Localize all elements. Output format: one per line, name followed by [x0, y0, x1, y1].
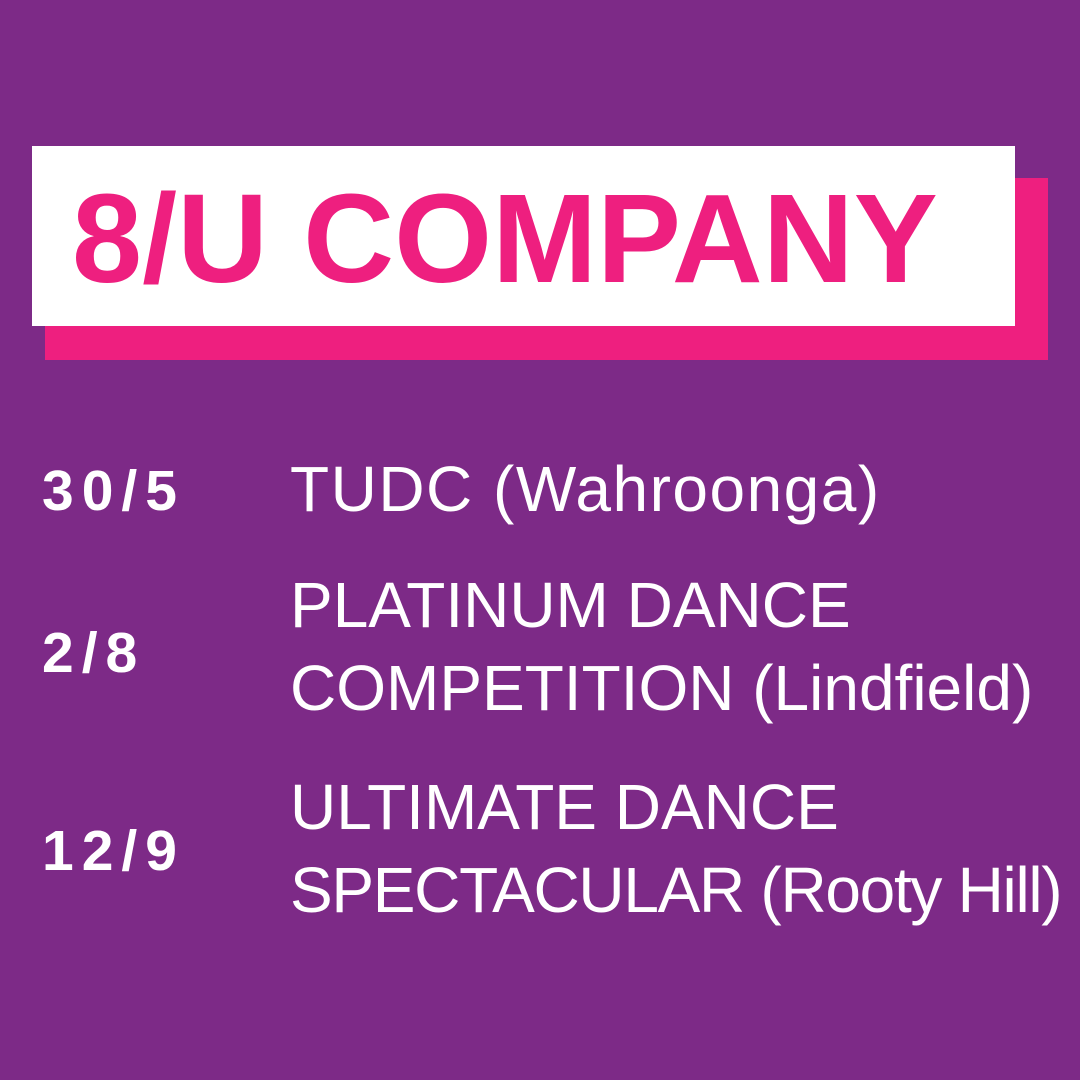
title banner [32, 146, 1048, 360]
event: Ultimate: SPECTACULAR (Rooty Hill) [290, 854, 1061, 926]
date: 12/9: 12/9 [42, 819, 185, 883]
date: 2/8: 2/8 [42, 621, 145, 685]
white title box [32, 146, 1015, 326]
pink shadow box [45, 178, 1048, 360]
event: Platinum [290, 569, 1033, 724]
event: Ultimate [290, 771, 1061, 926]
date: 30/5: 30/5 [42, 459, 185, 523]
title text: 8/U COMPANY [72, 168, 938, 309]
event: Ultimate: ULTIMATE DANCE [290, 771, 839, 843]
event: Platinum: PLATINUM DANCE [290, 569, 851, 641]
event: Platinum: COMPETITION (Lindfield) [290, 652, 1033, 724]
event: TUDC: TUDC (Wahroonga) [290, 453, 881, 525]
